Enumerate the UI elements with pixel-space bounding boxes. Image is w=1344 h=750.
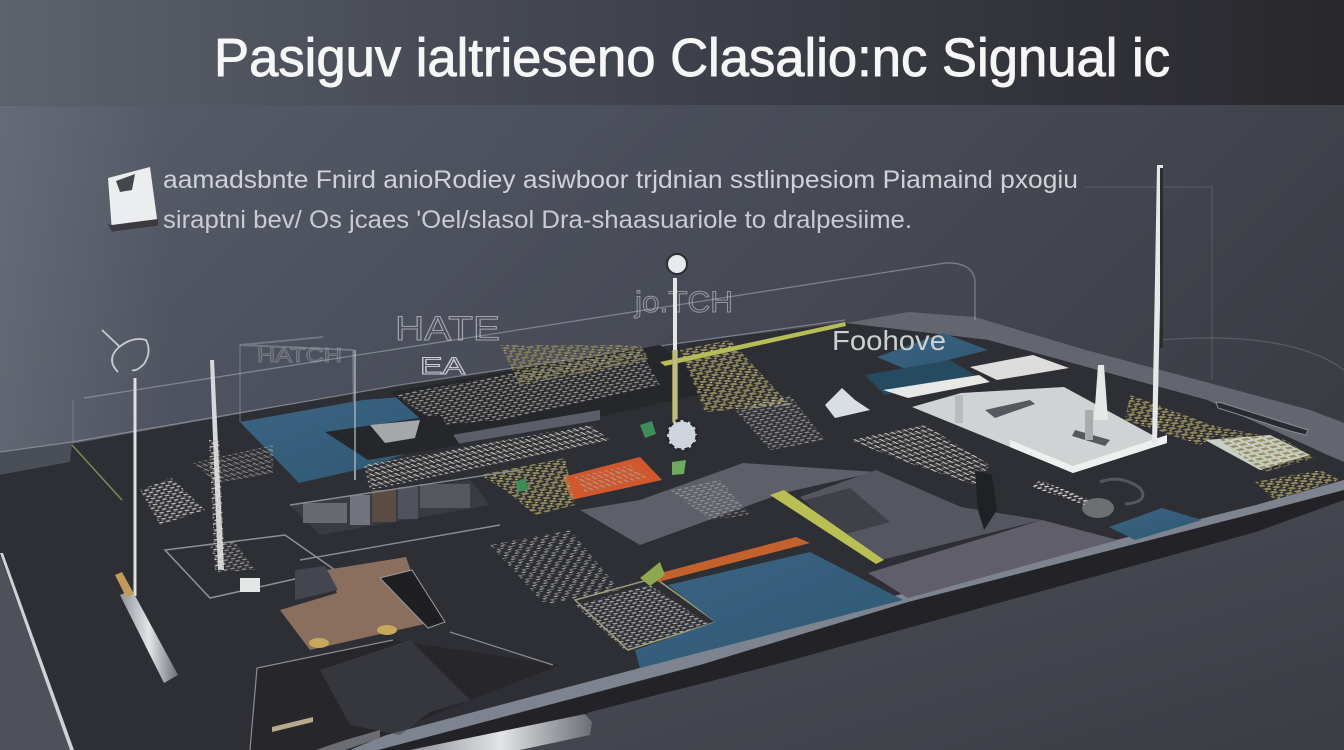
grey panel centre right bbox=[800, 470, 1042, 560]
device body bbox=[0, 312, 1344, 750]
chrome button bbox=[410, 714, 592, 750]
left dots bbox=[140, 478, 205, 525]
panel: left blue bbox=[240, 397, 445, 483]
grey lower wide bbox=[868, 520, 1118, 598]
antenna centre head bbox=[667, 254, 687, 274]
light corner left bbox=[0, 442, 72, 477]
left glow bbox=[0, 106, 170, 486]
intro block: siraptni bev/ Os jcaes 'Oel/slasol Dra-shaasuariole to dralpesiime. bbox=[163, 206, 912, 234]
white chip far right bbox=[1205, 435, 1310, 470]
icon: document bbox=[108, 167, 158, 232]
blue lower strip bbox=[865, 360, 975, 395]
outlined dots bbox=[210, 542, 255, 572]
yellow trace top bbox=[660, 322, 846, 366]
antenna centre bbox=[667, 254, 687, 438]
speaker slot bbox=[1216, 402, 1308, 435]
ghost labels bbox=[257, 286, 733, 380]
platform bottom lip bbox=[1010, 435, 1167, 473]
description text: aamadsbnte Fnird anioRodiey asiwboor trjdnian sstlinpesiom Piamaind pxogiu bbox=[163, 166, 1078, 194]
chip overlay far right bbox=[1210, 425, 1315, 472]
outer black band bbox=[0, 312, 1344, 750]
white plate small bbox=[883, 375, 990, 398]
lower centre dots bbox=[670, 480, 750, 520]
glass pane lines bbox=[0, 187, 1344, 480]
intro block bbox=[108, 166, 1078, 234]
dark slot bbox=[380, 570, 445, 628]
grey module row bbox=[290, 480, 490, 535]
brown panel bbox=[280, 557, 429, 650]
dots centre cluster bbox=[850, 425, 990, 485]
orange detail bbox=[575, 465, 648, 492]
bottom region outline bbox=[250, 632, 553, 750]
darker bottom board region bbox=[250, 640, 560, 750]
component pieces bbox=[370, 420, 420, 443]
board blocks bbox=[140, 322, 1340, 668]
outline rectangle left bbox=[165, 535, 335, 598]
dots: top chip field bbox=[395, 350, 660, 425]
tan grid bbox=[680, 340, 790, 412]
dots right bbox=[1255, 470, 1340, 500]
ghost label HATE: HATE bbox=[395, 310, 500, 348]
green chip right bbox=[1125, 395, 1225, 445]
tan tab bbox=[272, 717, 313, 732]
sphere node bbox=[667, 420, 697, 450]
IC field 2 bbox=[575, 585, 710, 650]
platform details bbox=[955, 395, 1110, 446]
board surface bbox=[0, 323, 1344, 750]
modules bbox=[303, 484, 470, 525]
translucent bottom shapes bbox=[320, 640, 470, 735]
lower background shade bbox=[460, 480, 1344, 750]
white platform bbox=[912, 387, 1167, 473]
chip row: top centre bbox=[390, 345, 720, 445]
label on board: Foohove bbox=[832, 325, 946, 356]
chrome bar tip bbox=[115, 572, 134, 597]
small pads bbox=[193, 445, 273, 483]
translucent post bbox=[354, 350, 356, 480]
dark connector bbox=[295, 566, 338, 600]
dots small cluster bbox=[735, 395, 825, 450]
aircraft shape bbox=[825, 388, 870, 418]
dots: left of grid bbox=[500, 345, 650, 385]
blue panel bottom bbox=[635, 552, 903, 668]
antenna small clip bbox=[240, 578, 260, 592]
ghost label top: jo.TCH bbox=[634, 286, 733, 319]
brown panel pads bbox=[309, 625, 397, 648]
left silver edge bbox=[0, 553, 74, 750]
antenna second lattice bbox=[209, 440, 225, 570]
chrome bar bbox=[115, 572, 178, 683]
antenna head scribble bbox=[102, 330, 149, 372]
grey tabs bbox=[310, 730, 380, 750]
long connector bbox=[364, 425, 610, 490]
yellow trace mid bbox=[770, 490, 884, 564]
chip outline bbox=[575, 578, 716, 650]
ghost label EA: EA bbox=[420, 353, 465, 380]
small component cluster bbox=[325, 415, 460, 460]
antenna right bbox=[1152, 165, 1163, 445]
antenna right dark section bbox=[1160, 168, 1163, 348]
ghost label left: HATCH bbox=[257, 345, 342, 367]
dark figure bbox=[975, 470, 997, 530]
orange block bbox=[563, 457, 662, 500]
grey panel centre bbox=[580, 463, 876, 545]
blue bottom right bbox=[1109, 508, 1202, 540]
dark trapezoid bbox=[805, 488, 890, 537]
green bend bbox=[640, 562, 665, 586]
frame bezel top right bbox=[845, 312, 1344, 490]
IC fields lower bbox=[490, 530, 620, 605]
green line left bbox=[72, 445, 122, 500]
green parts bbox=[515, 421, 686, 492]
left grey strip bbox=[0, 557, 70, 750]
antenna centre yellow section bbox=[672, 350, 678, 425]
frame highlight bottom bbox=[330, 480, 1344, 750]
brown chip border bbox=[480, 458, 575, 515]
chip traces row bbox=[1032, 480, 1090, 505]
white plate large bbox=[970, 355, 1069, 380]
antenna left bbox=[102, 330, 149, 596]
grey blobs bbox=[1082, 498, 1114, 518]
orange strip bbox=[653, 537, 810, 582]
title band bbox=[0, 0, 1344, 105]
platform tower bbox=[1094, 365, 1108, 420]
title: Pasiguv ialtrieseno Clasalio:nc Signual ic bbox=[214, 28, 1170, 88]
trace lines lower bbox=[290, 470, 520, 560]
connector cap bbox=[440, 410, 600, 445]
outlined pads bbox=[1100, 479, 1143, 504]
blue top right bbox=[877, 333, 988, 370]
antenna second bbox=[209, 360, 225, 570]
